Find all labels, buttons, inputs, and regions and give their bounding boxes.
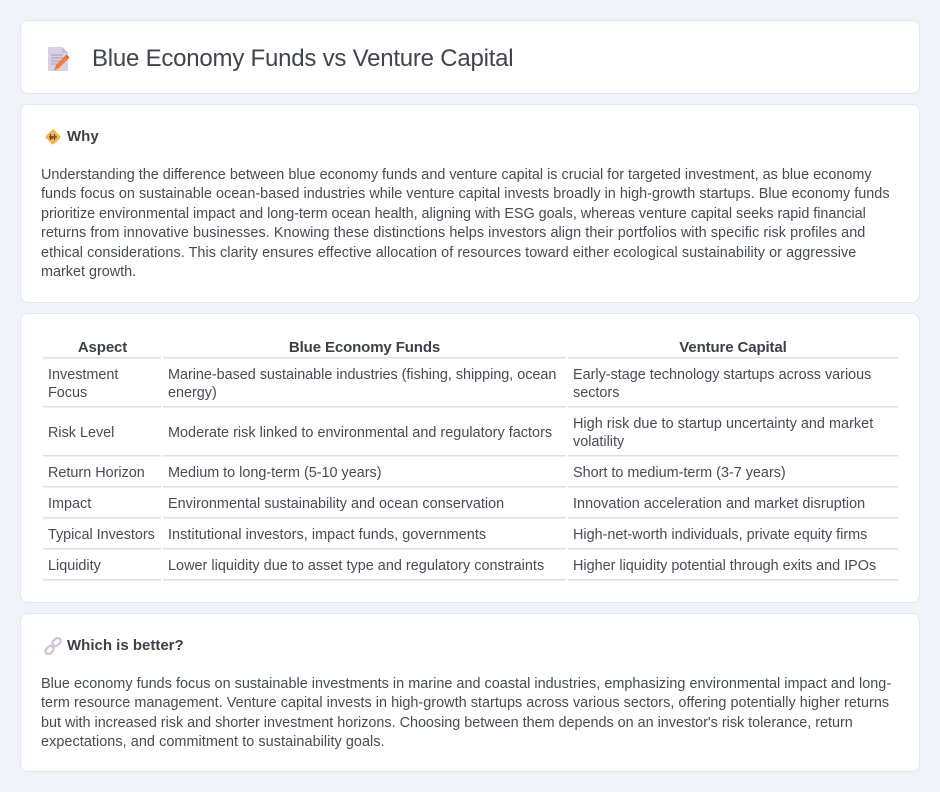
- text: why paragraph: Understanding the difference between blue economy funds and venture capital is crucial for targeted investment, as blue economy: [41, 167, 872, 183]
- icon: chain link: [44, 637, 62, 655]
- row: risk level: High risk due to startup uncertainty and market: [573, 416, 873, 432]
- icon: warning diamond: [46, 130, 60, 144]
- row: investment focus: Investment: [48, 367, 118, 383]
- row: investment focus: Marine-based sustainable industries (fishing, shipping, ocean: [168, 367, 556, 383]
- row: risk level: Moderate risk linked to environmental and regulatory factors: [168, 425, 552, 441]
- text: why paragraph: [41, 167, 890, 280]
- row: impact: [48, 496, 865, 512]
- row: liquidity: [48, 558, 876, 574]
- row: typical investors: High-net-worth individuals, private equity firms: [573, 527, 867, 543]
- table header row: [78, 339, 787, 356]
- heading: which is better: Which is better?: [67, 637, 184, 654]
- text: why paragraph: prioritize environmental impact and long-term ocean health, aligning with ESG goals, whereas venture capital seeks rapid financial: [41, 206, 866, 222]
- row: typical investors: [48, 527, 867, 543]
- row: impact: Innovation acceleration and market disruption: [573, 496, 865, 512]
- table header row: Aspect: [78, 339, 127, 356]
- row: investment focus: energy): [168, 385, 217, 401]
- heading: why: Why: [67, 128, 99, 145]
- row: liquidity: Higher liquidity potential through exits and IPOs: [573, 558, 876, 574]
- row: impact: Environmental sustainability and ocean conservation: [168, 496, 504, 512]
- text: why paragraph: funds focus on sustainable ocean-based industries while venture capital invests broadly in high-growth startups. Blue economy funds: [41, 186, 890, 202]
- text: which is better paragraph: [41, 676, 891, 750]
- row: investment focus: sectors: [573, 385, 619, 401]
- table header row: Venture Capital: [679, 339, 787, 356]
- table header row: Blue Economy Funds: [289, 339, 440, 356]
- row: typical investors: Typical Investors: [48, 527, 155, 543]
- text: which is better paragraph: but with increased risk and shorter investment horizons. Choosing between them depends on an investor's risk tolerance, return: [41, 715, 853, 731]
- row: typical investors: Institutional investors, impact funds, governments: [168, 527, 486, 543]
- row: risk level: volatility: [573, 434, 624, 450]
- row: risk level: [48, 416, 874, 450]
- row: risk level: Risk Level: [48, 425, 114, 441]
- text: which is better paragraph: Blue economy funds focus on sustainable investments in marine and coastal industries, emphasizing environmental impact and long-: [41, 676, 891, 692]
- row: liquidity: Lower liquidity due to asset type and regulatory constraints: [168, 558, 544, 574]
- panel: title header: [20, 20, 920, 94]
- row: liquidity: Liquidity: [48, 558, 101, 574]
- row: investment focus: Early-stage technology startups across various: [573, 367, 871, 383]
- panel: comparison table: [20, 313, 920, 603]
- icon: memo with pencil: [48, 47, 70, 71]
- text: why paragraph: ethical considerations. This clarity ensures effective allocation of resources toward either ecological sustainability or aggressive: [41, 245, 856, 261]
- panel: which is better: [20, 613, 920, 772]
- row: impact: Impact: [48, 496, 91, 512]
- panel: why: [20, 104, 920, 303]
- row: investment focus: Focus: [48, 385, 87, 401]
- row: return horizon: Short to medium-term (3-7 years): [573, 465, 786, 481]
- row: investment focus: [48, 367, 871, 401]
- row: return horizon: Return Horizon: [48, 465, 145, 481]
- text: which is better paragraph: expectations, and commitment to sustainability goals.: [41, 734, 385, 750]
- text: which is better paragraph: term resource management. Venture capital invests in high-growth startups across various sectors, offering potentially higher returns: [41, 695, 889, 711]
- row: return horizon: [48, 465, 786, 481]
- text: why paragraph: returns from innovative businesses. Knowing these distinctions helps investors align their portfolios with specific risk profiles and: [41, 225, 865, 241]
- text: why paragraph: market growth.: [41, 264, 136, 280]
- title: Blue Economy Funds vs Venture Capital: [92, 45, 513, 72]
- row: return horizon: Medium to long-term (5-10 years): [168, 465, 382, 481]
